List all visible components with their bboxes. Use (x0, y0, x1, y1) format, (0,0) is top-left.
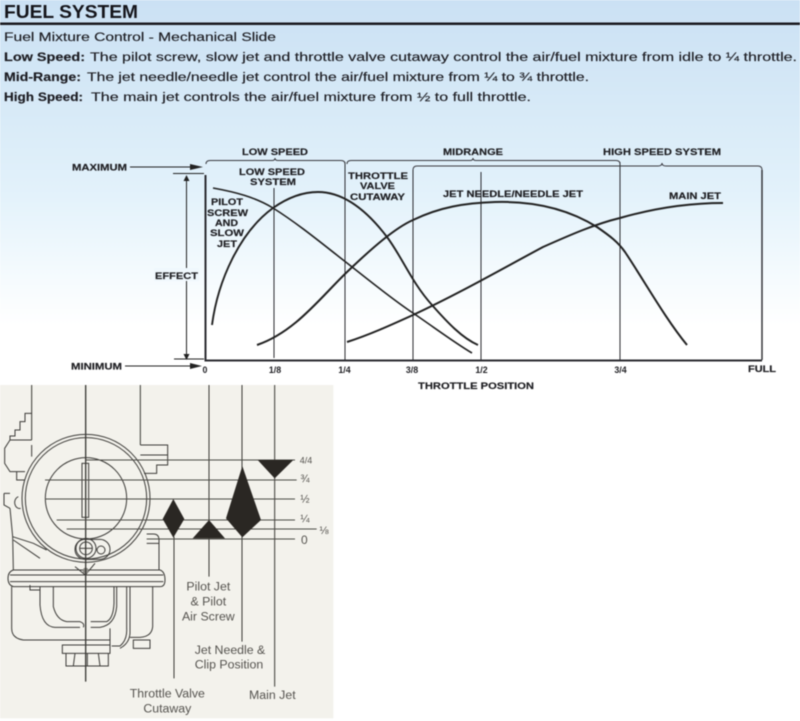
horizontal throttle scale lines (45, 460, 317, 539)
range brackets (206, 158, 762, 170)
text block: fuel mixture description: Low Speed: (4, 52, 85, 64)
effect axis label and arrow (154, 175, 204, 360)
curve labels: SCREW (207, 208, 249, 218)
range headings: HIGH SPEED SYSTEM (603, 147, 721, 157)
scale labels: ¾ (300, 474, 310, 486)
curve labels: THROTTLE (348, 171, 408, 181)
curve labels: LOW SPEED (239, 167, 305, 177)
curve labels: AND (215, 218, 238, 228)
scale labels: ¼ (300, 514, 310, 526)
curve labels (207, 167, 722, 249)
minimum marker (71, 362, 202, 372)
curve labels: SYSTEM (250, 177, 296, 187)
carburetor body drawing (4, 413, 168, 666)
curve: main jet (347, 203, 723, 342)
curve labels: MAIN JET (669, 191, 722, 201)
label: main jet: Main Jet (249, 688, 296, 702)
scale labels (300, 455, 329, 547)
curve labels: JET NEEDLE/NEEDLE JET (443, 189, 584, 199)
effect axis label and arrow: EFFECT (155, 271, 199, 281)
range headings: MIDRANGE (443, 147, 503, 157)
label: jet needle and clip position: Clip Position (195, 658, 263, 672)
label: throttle valve cutaway: Cutaway (143, 701, 192, 715)
maximum marker (72, 162, 204, 174)
throttle position tick labels: FULL (748, 364, 777, 374)
text block: fuel mixture description: The jet needle/needle jet control the air/fuel mixture from ¼ to ¾ throttle. (87, 72, 589, 84)
vertical guide lines (32, 385, 275, 687)
scale labels: ⅛ (319, 525, 329, 537)
marker: pilot jet (193, 520, 225, 538)
label: jet needle and clip position: Jet Needle & (195, 643, 266, 657)
text block: fuel mixture description: High Speed: (4, 92, 83, 104)
label: pilot jet and pilot air screw: Pilot Jet (186, 580, 231, 594)
scale labels: ½ (300, 494, 310, 506)
throttle position tick labels (203, 364, 777, 375)
curve labels: JET (217, 239, 238, 249)
throttle position tick labels: 3/8 (406, 365, 418, 375)
text block: fuel mixture description: The pilot screw, slow jet and throttle valve cutaway control the air/fuel mixture from idle to ¼ throttle. (90, 52, 797, 64)
scale labels: 4/4 (300, 455, 312, 465)
label: pilot jet and pilot air screw: Air Screw (182, 610, 235, 624)
curve labels: SLOW (210, 228, 245, 238)
label: pilot jet and pilot air screw: & Pilot (191, 595, 227, 609)
curve labels: VALVE (360, 181, 395, 191)
range headings (242, 147, 721, 157)
maximum marker: MAXIMUM (72, 162, 127, 172)
title: FUEL SYSTEM (4, 2, 138, 22)
throttle position tick labels: 3/4 (614, 365, 627, 375)
marker: jet needle (226, 466, 261, 537)
marker: throttle valve cutaway (163, 499, 184, 538)
text block: fuel mixture description: Mid-Range: (4, 72, 81, 84)
label: throttle valve cutaway: Throttle Valve (130, 686, 205, 700)
scale labels: 0 (301, 533, 308, 547)
chart axes and position lines (206, 162, 762, 360)
text block: fuel mixture description: The main jet controls the air/fuel mixture from ½ to full throttle. (91, 92, 531, 104)
curve labels: PILOT (211, 197, 244, 207)
throttle position tick labels: 1/8 (269, 365, 281, 375)
throttle position tick labels: 1/2 (475, 365, 488, 375)
text block: fuel mixture description (4, 32, 797, 104)
curve: jet needle and needle jet (257, 202, 687, 345)
throttle position tick labels: 0 (203, 365, 208, 375)
text block: fuel mixture description: Fuel Mixture Control - Mechanical Slide (4, 32, 276, 44)
chart: effect versus throttle position (71, 147, 777, 391)
curve: pilot screw and slow jet (213, 188, 472, 353)
x axis title: THROTTLE POSITION (418, 381, 534, 391)
throttle position tick labels: 1/4 (338, 365, 351, 375)
panel: carburetor diagram (0, 385, 333, 718)
marker: main jet (258, 460, 293, 478)
minimum marker: MINIMUM (71, 362, 122, 372)
range headings: LOW SPEED (242, 147, 308, 157)
curve labels: CUTAWAY (350, 192, 405, 202)
curve: low speed system (212, 192, 478, 345)
